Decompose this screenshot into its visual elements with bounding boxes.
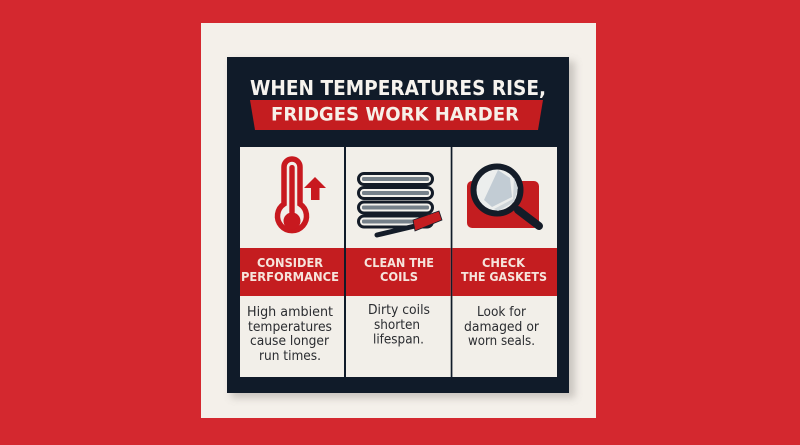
- red heading band: PERFORMANCE: [241, 270, 339, 284]
- body text: temperatures: [248, 320, 332, 335]
- body text: cause longer: [250, 334, 330, 349]
- body text: High ambient: [247, 305, 333, 320]
- dark poster panel: [227, 57, 569, 393]
- body text: run times.: [259, 349, 321, 364]
- red heading band: [240, 248, 344, 296]
- body text: shorten: [374, 318, 420, 333]
- panel: clean the coils: [346, 147, 451, 377]
- red heading band: CHECK: [482, 256, 526, 270]
- icon: thermometer with up arrow: [278, 159, 326, 231]
- red heading band: CLEAN THE: [364, 256, 434, 270]
- title line 2: FRIDGES WORK HARDER: [271, 104, 519, 126]
- panel: consider performance: [240, 147, 344, 377]
- body text: lifespan.: [373, 332, 424, 348]
- body text: [247, 305, 333, 364]
- icon: magnifier over red gasket: [467, 166, 539, 228]
- icon: coils and brush: [358, 174, 442, 235]
- body text: [464, 305, 540, 349]
- red heading band: CONSIDER: [257, 256, 323, 270]
- body text: Dirty coils: [368, 303, 430, 318]
- panel: check the gaskets: [452, 147, 557, 377]
- body text: damaged or: [464, 320, 540, 335]
- body text: Look for: [477, 305, 527, 320]
- poster shadow: [231, 61, 575, 398]
- title banner: [250, 100, 543, 130]
- cream frame panel: [201, 23, 596, 418]
- red heading band: THE GASKETS: [461, 270, 547, 284]
- body text: [368, 303, 430, 348]
- title line 1: WHEN TEMPERATURES RISE,: [250, 76, 546, 100]
- red heading band: [452, 248, 557, 296]
- red heading band: [346, 248, 451, 296]
- red heading band: COILS: [380, 270, 418, 284]
- body text: worn seals.: [468, 334, 535, 349]
